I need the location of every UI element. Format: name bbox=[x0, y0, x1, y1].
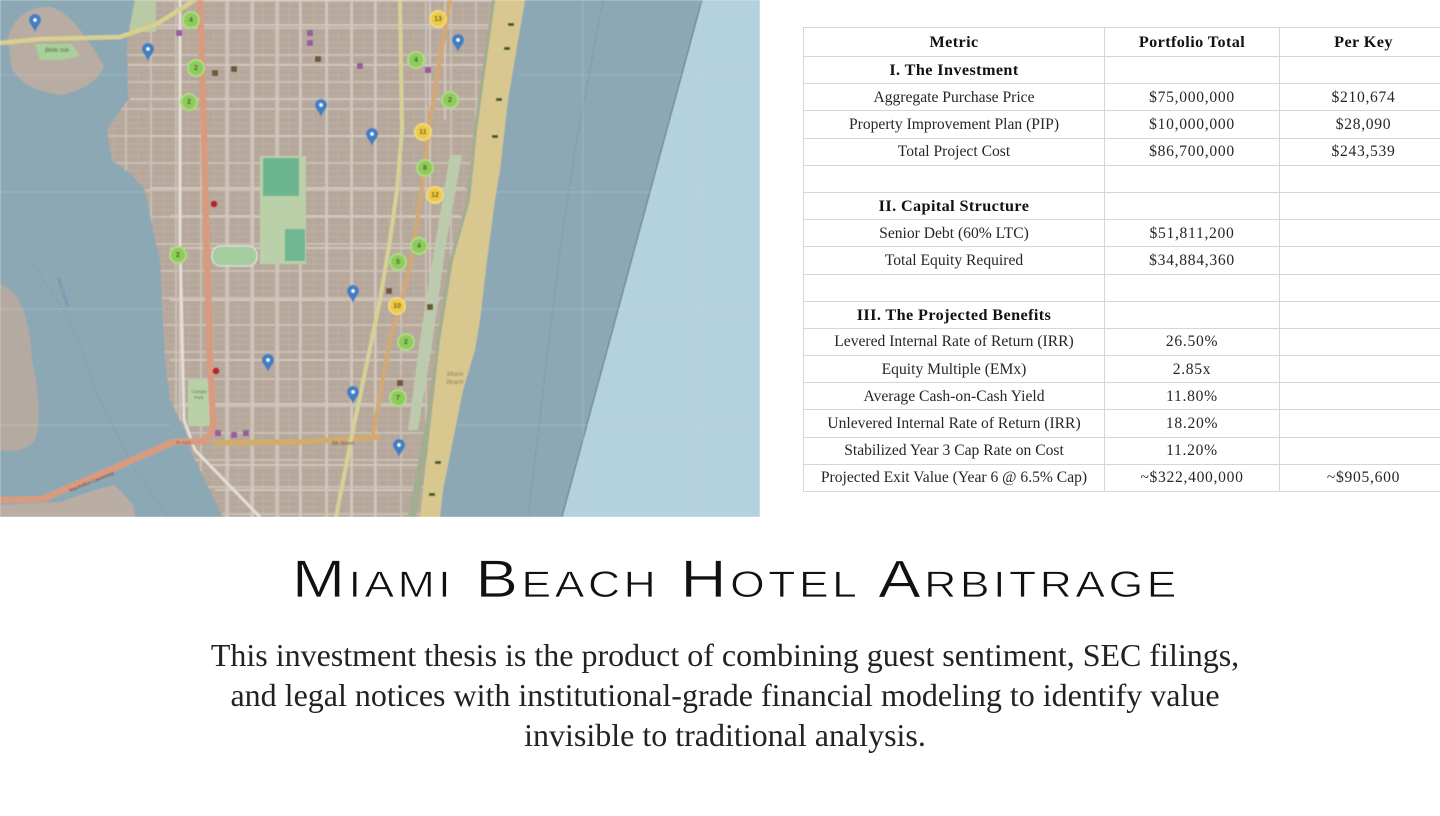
cluster: 2 bbox=[442, 92, 458, 108]
island: Belle Isle bbox=[8, 7, 104, 95]
row: cap rate on cost: 11.20% bbox=[1166, 442, 1218, 459]
tile seams bbox=[0, 0, 760, 517]
white boulevard: Alton and Meridian bbox=[180, 0, 260, 517]
park: Maurice Gibb area bbox=[130, 0, 156, 32]
water: bay and near-shore shaded area bbox=[0, 0, 702, 517]
thesis paragraph: This investment thesis is the product of combining guest sentiment, SEC filings, bbox=[211, 637, 1239, 673]
bay channel line bbox=[30, 260, 168, 517]
thesis paragraph bbox=[211, 637, 1239, 753]
row: senior debt: Senior Debt (60% LTC) bbox=[879, 225, 1029, 242]
pin bbox=[393, 439, 405, 457]
row: total project cost: $86,700,000 bbox=[1149, 143, 1235, 160]
cluster: 2 bbox=[181, 94, 197, 110]
cluster: 13 bbox=[430, 11, 446, 27]
row: senior debt: $51,811,200 bbox=[1149, 225, 1235, 242]
map label: Fifth Street: 5th Street bbox=[332, 441, 354, 447]
cluster: 11 bbox=[415, 124, 431, 140]
pin bbox=[142, 43, 154, 61]
cluster: 7: 7 bbox=[396, 395, 400, 402]
cluster: 2 bbox=[398, 334, 414, 350]
pin bbox=[315, 99, 327, 117]
road: Collins Avenue bbox=[372, 0, 450, 440]
thesis paragraph: and legal notices with institutional-grade financial modeling to identify value bbox=[230, 677, 1220, 713]
row: levered IRR: 26.50% bbox=[1166, 333, 1218, 350]
road: Fifth Street bbox=[214, 437, 380, 443]
map label: FL A1A: FL A1A bbox=[176, 440, 191, 445]
row: total project cost bbox=[898, 143, 1396, 160]
pin bbox=[347, 386, 359, 404]
cluster: 8: 8 bbox=[423, 165, 427, 172]
cluster: 5 bbox=[390, 254, 406, 270]
cluster markers bbox=[170, 11, 458, 406]
pin bbox=[452, 34, 464, 52]
park: Canopy Park: Canopy bbox=[191, 389, 208, 394]
cluster: 4: 4 bbox=[189, 17, 193, 24]
table header row: Per Key bbox=[1334, 33, 1393, 51]
cluster: 4: 4 bbox=[414, 57, 418, 64]
beach palm icons bbox=[429, 23, 514, 496]
ocean: light offshore water bbox=[0, 0, 760, 517]
cluster: 4 bbox=[408, 52, 424, 68]
row: cap rate on cost bbox=[844, 442, 1218, 459]
row: unlevered IRR: 18.20% bbox=[1166, 415, 1218, 432]
row: PIP bbox=[849, 116, 1391, 133]
row: cash-on-cash yield bbox=[863, 388, 1218, 405]
map label: Miami Beach: Beach bbox=[446, 380, 464, 386]
section heading: The Investment: I. The Investment bbox=[889, 61, 1019, 79]
row: projected exit value: ~$905,600 bbox=[1327, 469, 1400, 486]
row: equity multiple: Equity Multiple (EMx) bbox=[882, 361, 1026, 378]
table header row: Portfolio Total bbox=[1139, 33, 1245, 51]
cluster: 10 bbox=[389, 298, 405, 314]
park: Lummus Park strip bbox=[408, 155, 462, 430]
row: equity multiple: 2.85x bbox=[1173, 361, 1211, 378]
row: purchase price: $210,674 bbox=[1331, 89, 1396, 106]
cluster: 2: 2 bbox=[404, 339, 408, 346]
cluster: 13: 13 bbox=[434, 16, 442, 23]
row: total project cost: Total Project Cost bbox=[898, 143, 1010, 160]
title: Miami Beach Hotel Arbitrage bbox=[292, 550, 1180, 609]
cluster: 12 bbox=[427, 187, 443, 203]
row: total equity bbox=[885, 252, 1235, 269]
cluster: 4 bbox=[411, 238, 427, 254]
section heading: Capital Structure: II. Capital Structure bbox=[879, 197, 1029, 215]
row: projected exit value: ~$322,400,000 bbox=[1140, 469, 1244, 486]
row: equity multiple bbox=[882, 361, 1211, 378]
map label: Miami Beach: Miami bbox=[447, 372, 463, 378]
map of South Beach bbox=[0, 0, 760, 517]
table header row: Metric bbox=[929, 33, 979, 51]
row: purchase price: Aggregate Purchase Price bbox=[873, 89, 1035, 106]
island: Belle Isle: Belle Isle bbox=[45, 48, 70, 54]
row: purchase price: $75,000,000 bbox=[1149, 89, 1235, 106]
row: cash-on-cash yield: Average Cash-on-Cash Yield bbox=[863, 388, 1044, 405]
row: levered IRR bbox=[834, 333, 1218, 350]
row: PIP: $28,090 bbox=[1336, 116, 1391, 133]
park: Flamingo Park bbox=[212, 156, 306, 266]
cluster: 4 bbox=[183, 12, 199, 28]
row: cash-on-cash yield: 11.80% bbox=[1166, 388, 1218, 405]
cluster: 2: 2 bbox=[194, 65, 198, 72]
cluster: 12: 12 bbox=[431, 192, 439, 199]
pin bbox=[262, 354, 274, 372]
row: total equity: Total Equity Required bbox=[885, 252, 1023, 269]
cluster: 2: 2 bbox=[187, 99, 191, 106]
row: PIP: Property Improvement Plan (PIP) bbox=[849, 116, 1059, 133]
cluster: 5: 5 bbox=[396, 259, 400, 266]
row: projected exit value: Projected Exit Value (Year 6 @ 6.5% Cap) bbox=[821, 469, 1087, 486]
row: projected exit value bbox=[821, 469, 1400, 486]
road: Washington Avenue bbox=[336, 0, 402, 517]
cluster: 2 bbox=[188, 60, 204, 76]
table header row bbox=[929, 33, 1393, 51]
beach bbox=[405, 0, 525, 517]
financial summary table bbox=[803, 27, 1440, 492]
pin bbox=[29, 14, 41, 32]
row: PIP: $10,000,000 bbox=[1149, 116, 1235, 133]
thesis paragraph: invisible to traditional analysis. bbox=[524, 717, 926, 753]
row: cap rate on cost: Stabilized Year 3 Cap Rate on Cost bbox=[844, 442, 1064, 459]
cluster: 2 bbox=[170, 247, 186, 263]
road: Alton Road and MacArthur Causeway bbox=[0, 0, 213, 500]
park: Canopy Park: Park bbox=[194, 395, 204, 400]
dune strip bbox=[412, 0, 496, 517]
road: Venetian Causeway bbox=[0, 0, 195, 43]
cluster: 11: 11 bbox=[419, 129, 427, 136]
pin bbox=[347, 285, 359, 303]
territorial boundary line bbox=[562, 0, 702, 517]
row: unlevered IRR: Unlevered Internal Rate of Return (IRR) bbox=[827, 415, 1081, 432]
park: Canopy Park bbox=[188, 380, 210, 426]
cluster: 2: 2 bbox=[448, 97, 452, 104]
row: total equity: $34,884,360 bbox=[1149, 252, 1235, 269]
poi icons bbox=[176, 30, 431, 438]
map label: Main Channel: Main Channel bbox=[55, 277, 70, 308]
island: western bay island bbox=[0, 285, 39, 451]
section heading: Projected Benefits: III. The Projected Benefits bbox=[857, 306, 1051, 324]
row: levered IRR: Levered Internal Rate of Return (IRR) bbox=[834, 333, 1074, 350]
row: unlevered IRR bbox=[827, 415, 1218, 432]
row: total project cost: $243,539 bbox=[1331, 143, 1396, 160]
cluster: 4: 4 bbox=[417, 243, 421, 250]
map label: MacArthur Causeway: MacArthur Causeway bbox=[69, 470, 116, 494]
land: South Beach street grid bbox=[100, 0, 520, 517]
cluster: 10: 10 bbox=[393, 303, 401, 310]
cluster: 8 bbox=[417, 160, 433, 176]
red transit icons bbox=[211, 201, 219, 374]
blue location pins bbox=[29, 14, 464, 457]
pin bbox=[366, 128, 378, 146]
cluster: 7 bbox=[390, 390, 406, 406]
island: southern marina bbox=[0, 485, 135, 517]
shipping line offshore bbox=[528, 0, 603, 517]
row: purchase price bbox=[873, 89, 1396, 106]
row: senior debt bbox=[879, 225, 1235, 242]
cluster: 2: 2 bbox=[176, 252, 180, 259]
